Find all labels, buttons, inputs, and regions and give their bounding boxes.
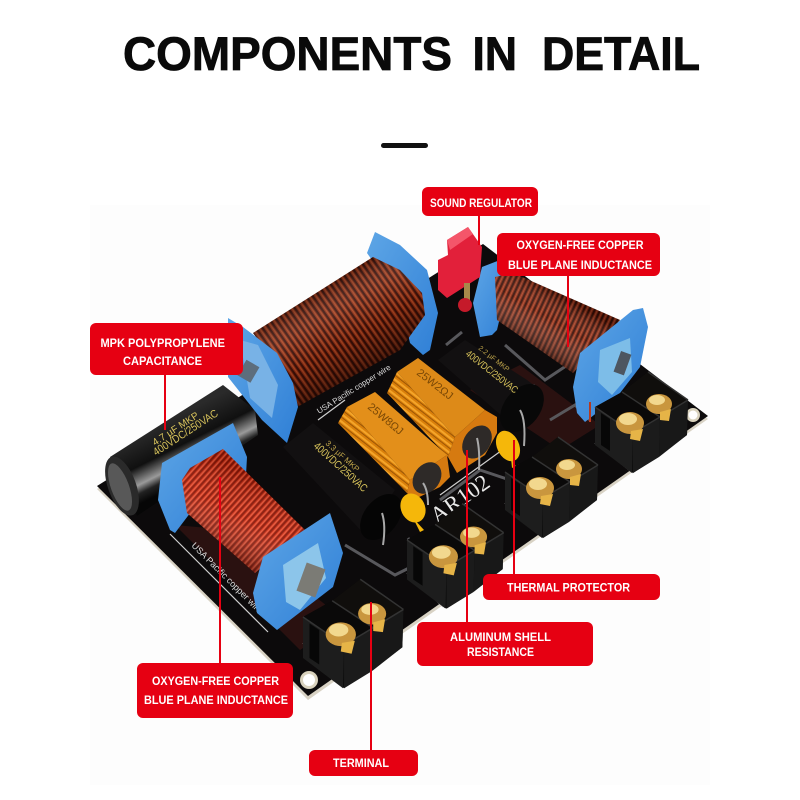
aluminum shell resistor: front: 25W8ΩJ: [365, 401, 405, 438]
callout: terminal: TERMINAL: [333, 756, 389, 770]
capacitor: 4.7uF MKP: [98, 385, 258, 520]
capacitor: 2.2uF MKP: 400VDC/250VAC: [463, 349, 520, 396]
callout: top oxygen-free copper inductance: OXYGEN-FREE COPPER: [516, 238, 644, 252]
right coil far flange: [473, 260, 510, 337]
terminal block: right: [595, 372, 688, 473]
inductor: large coil: [228, 232, 438, 443]
circuit board: [97, 244, 708, 700]
aluminum shell resistor: rear: [387, 358, 498, 473]
aluminum shell resistor: front: [338, 392, 450, 505]
inductor: right coil: [473, 260, 648, 422]
callout: thermal protector: THERMAL PROTECTOR: [507, 580, 630, 594]
callout: MPK polypropylene capacitance: MPK POLYPROPYLENE: [100, 336, 225, 350]
title: DETAIL: [542, 27, 700, 80]
callout: MPK polypropylene capacitance: [90, 323, 243, 375]
callout: thermal protector: [483, 574, 660, 600]
callout: bottom oxygen-free copper inductance: BLUE PLANE INDUCTANCE: [144, 693, 288, 707]
coil near flange: [228, 318, 298, 443]
sound regulator: [438, 227, 482, 312]
callout: sound regulator: SOUND REGULATOR: [430, 198, 533, 210]
callout: bottom oxygen-free copper inductance: [137, 663, 293, 718]
callout: top oxygen-free copper inductance: BLUE PLANE INDUCTANCE: [508, 258, 652, 272]
capacitor: 3.3uF MKP: 400VDC/250VAC: [311, 440, 370, 495]
capacitor: 3.3uF MKP: 3.3 µF MKP: [324, 439, 361, 474]
terminal block: middle right: [505, 437, 598, 538]
capacitor: 2.2uF MKP: 2.2 µF MKP: [477, 345, 511, 374]
aluminum shell resistor: rear: 25W2ΩJ: [414, 367, 455, 403]
bottom coil far flange: [158, 423, 247, 533]
terminal block: middle left: [407, 504, 504, 609]
bottom coil near flange: [253, 513, 343, 630]
capacitor: 4.7uF MKP: 400VDC/250VAC: [151, 408, 221, 459]
callout: aluminum shell resistance: ALUMINUM SHELL: [450, 630, 551, 644]
leader lines: [165, 216, 568, 750]
coil far flange: [367, 232, 438, 355]
capacitor: 2.2uF MKP: [438, 340, 553, 446]
title: [123, 27, 700, 80]
title dash: [381, 143, 428, 148]
callout: MPK polypropylene capacitance: CAPACITANCE: [123, 354, 202, 368]
capacitor: 3.3uF MKP: [283, 423, 410, 548]
callout: sound regulator: [422, 187, 538, 216]
title: COMPONENTS: [123, 27, 452, 80]
callout: aluminum shell resistance: RESISTANCE: [467, 645, 534, 659]
board text: USA Pacific copper wire: [190, 540, 265, 615]
callout: bottom oxygen-free copper inductance: OXYGEN-FREE COPPER: [152, 674, 279, 688]
circuit board: AR102: [426, 470, 494, 528]
thermal protector discs: [396, 427, 525, 532]
terminal block: left: [303, 579, 403, 688]
capacitor: 4.7uF MKP: 4.7 µF MKP: [151, 410, 201, 449]
photo background: [90, 205, 710, 785]
inductor: bottom-left coil: [158, 423, 343, 630]
callout: top oxygen-free copper inductance: [497, 233, 660, 276]
callout: aluminum shell resistance: [417, 622, 593, 666]
mounting holes: [300, 671, 318, 689]
circuit board: USA Pacific copper wire: [315, 363, 393, 416]
callout: terminal: [309, 750, 418, 776]
right coil near flange: [573, 308, 648, 422]
title: IN: [472, 27, 517, 80]
board traces: [345, 332, 590, 575]
